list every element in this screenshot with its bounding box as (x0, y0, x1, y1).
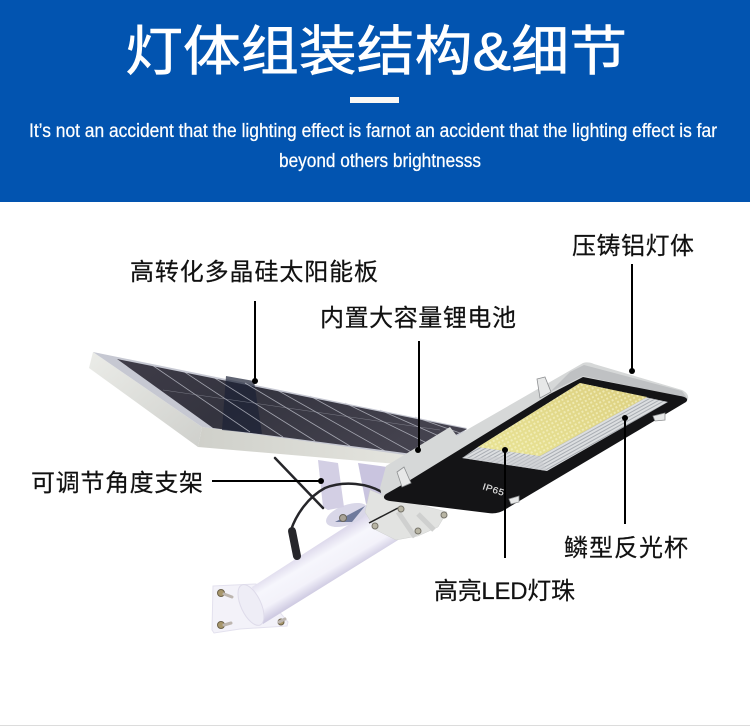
subtitle (29, 121, 718, 172)
LED reflector (462, 383, 668, 471)
subtitle: beyond others brightnesss (279, 151, 481, 172)
mounting plate and pole (212, 513, 398, 633)
plate bolts (218, 590, 284, 628)
solar panel (89, 352, 467, 466)
label: adjustable bracket: 可调节角度支架 (31, 470, 203, 497)
label: solar panel (130, 259, 378, 384)
clips (397, 377, 665, 504)
black housing (384, 377, 687, 513)
label: battery: 内置大容量锂电池 (320, 305, 516, 332)
adjustable bracket (318, 460, 387, 532)
header banner (0, 0, 750, 202)
label: battery (320, 305, 516, 453)
lamp body (380, 362, 688, 513)
title: 灯体组装结构&细节 (125, 22, 627, 82)
label: die-cast aluminium body (572, 233, 694, 374)
lamp clamp (365, 490, 447, 540)
panel cell lines (152, 365, 460, 454)
label: scale reflector (564, 415, 688, 562)
label: adjustable bracket (31, 470, 324, 497)
solar street light illustration (89, 352, 688, 633)
label: bright LED beads: 高亮LED灯珠 (434, 578, 575, 605)
IP65 mark: IP65 (481, 482, 506, 499)
label: solar panel: 高转化多晶硅太阳能板 (130, 259, 378, 286)
cables (275, 458, 382, 556)
label: die-cast aluminium body: 压铸铝灯体 (572, 233, 694, 260)
label: bright LED beads (434, 447, 575, 605)
label: scale reflector: 鳞型反光杯 (564, 535, 688, 562)
title accent bar (350, 97, 399, 103)
